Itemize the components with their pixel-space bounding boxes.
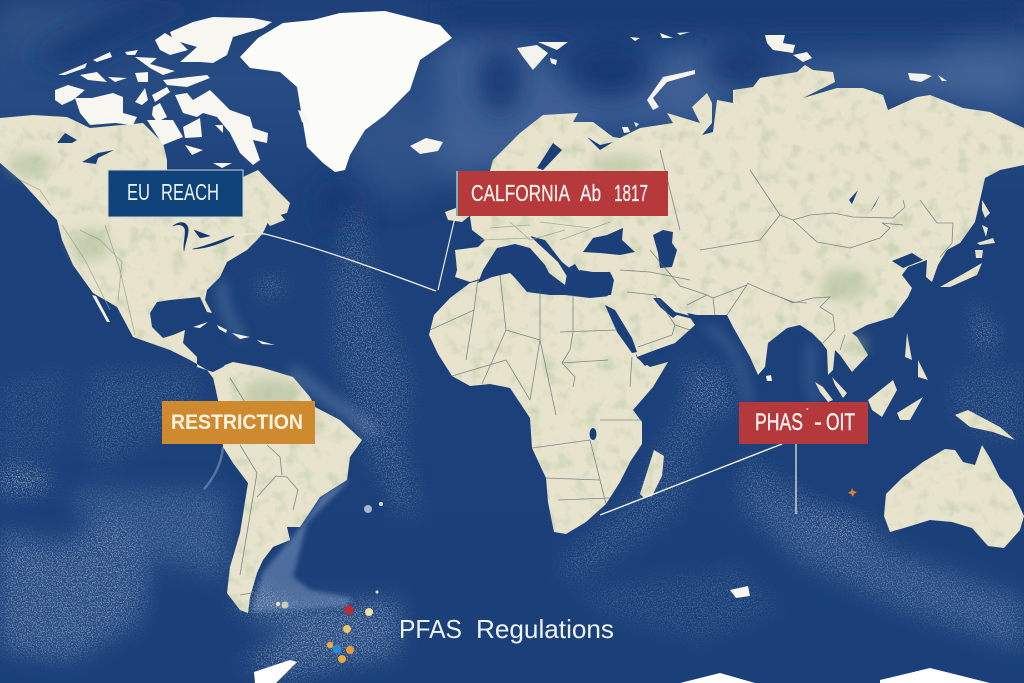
pale arc beside South America [204, 447, 223, 489]
connector line: Phase-out downward [795, 444, 797, 514]
island group: Asia and Oceania [264, 200, 1015, 498]
legend dots [276, 602, 373, 663]
label: Phase-out: PHAS [755, 409, 803, 436]
title: PFAS Regulations: PFAS [399, 614, 462, 644]
green vegetation veins: Europe and western North America [20, 180, 610, 335]
pale bubbles near Patagonia [364, 502, 383, 594]
label: California AB 1817: CALFORNIA [471, 180, 570, 206]
pale coastal shelves [222, 285, 816, 430]
country borders [230, 150, 953, 595]
label: California AB 1817: 1817 [614, 180, 648, 206]
label: EU REACH: REACH [161, 179, 219, 205]
Antarctic ice [254, 660, 990, 683]
label: Phase-out: OIT [826, 409, 855, 436]
connector line: Americas to Africa [233, 234, 436, 291]
continental shelf: Patagonia [252, 478, 352, 612]
continent: South America [213, 362, 362, 613]
label: Phase-out: ˙ [806, 406, 810, 420]
label: Restriction: RESTRICTION [171, 411, 303, 434]
islands: Arctic Canada [55, 17, 309, 168]
continent: Australia [884, 445, 1024, 548]
connector line: California label to Africa [438, 213, 456, 290]
label: Phase-out: - [814, 409, 822, 436]
seas and inland water [57, 133, 923, 440]
title: PFAS Regulations: Regulations [476, 614, 614, 644]
label: Restriction [162, 401, 315, 444]
icon: orange star marker [848, 488, 857, 497]
title: PFAS Regulations [399, 614, 614, 644]
islands: Arctic Eurasia and Atlantic [92, 32, 947, 598]
label: California AB 1817 [456, 171, 668, 216]
connector line: Phase-out to Africa [600, 444, 782, 515]
continent: North America [0, 115, 290, 378]
continent: Greenland [240, 11, 452, 172]
arrow glyph below EU REACH [173, 222, 234, 251]
label: EU REACH: EU [127, 179, 150, 205]
label: Phase-out [739, 402, 868, 444]
label: EU REACH [108, 170, 243, 217]
speckled ocean ridges [0, 205, 1024, 683]
continent: Eurasia [455, 65, 1024, 375]
vegetation tint on land [8, 153, 869, 435]
label: California AB 1817: Ab [580, 180, 601, 206]
continent: Africa [429, 273, 668, 534]
